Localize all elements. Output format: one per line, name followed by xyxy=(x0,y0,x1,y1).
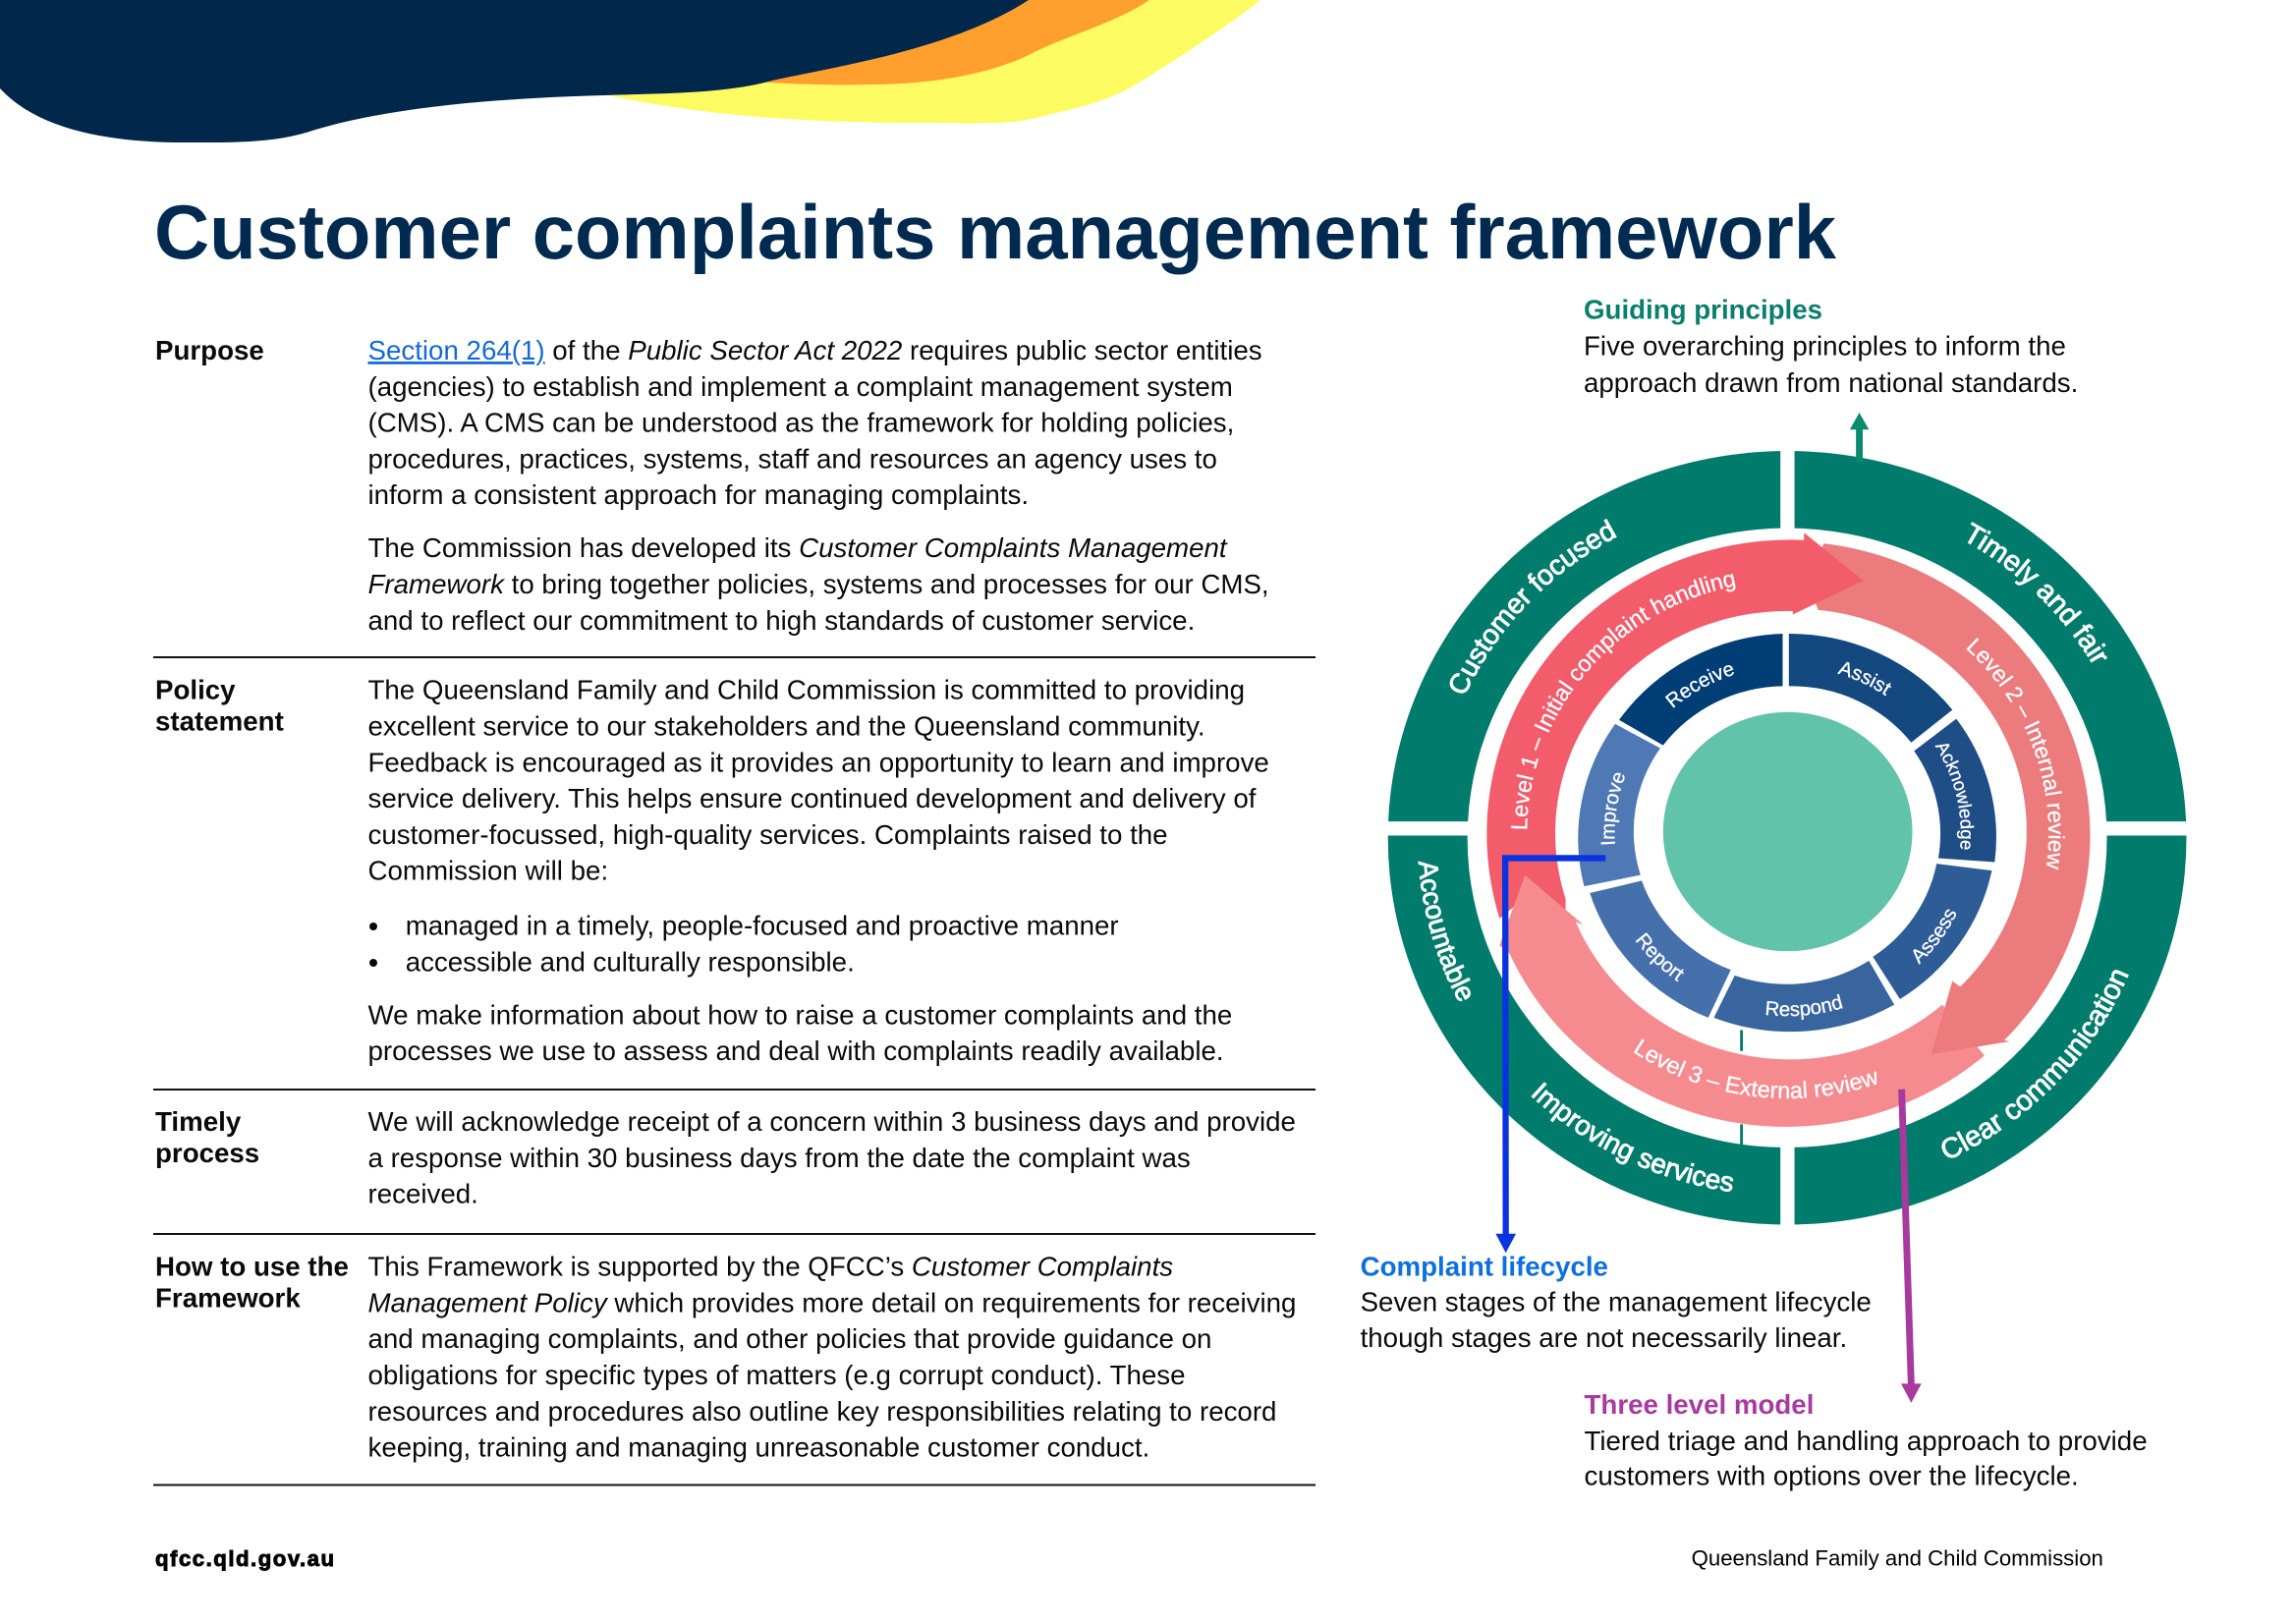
arrow: to complaint lifecycle xyxy=(1495,858,1605,1253)
section: purpose: Section 264(1) of the Public Sector Act 2022 requires public sector entities xyxy=(367,335,1262,365)
section: policy statement: statement xyxy=(155,705,284,737)
section: policy statement: customer-focussed, high-quality services. Complaints raised to the xyxy=(367,819,1168,850)
ring: guiding principles: Timely and fair xyxy=(1967,522,2107,662)
callout: guiding principles: Five overarching principles to inform the xyxy=(1584,331,2066,362)
section: policy statement: We make information about how to raise a customer complaints and the xyxy=(367,999,1232,1030)
callout: complaint lifecycle: though stages are not necessarily linear. xyxy=(1361,1322,1847,1353)
section: timely process: Timely xyxy=(155,1106,242,1137)
section: purpose: (agencies) to establish and implement a complaint management system xyxy=(367,371,1233,402)
footer: organisation: Queensland Family and Child Commission xyxy=(1692,1545,2103,1570)
ring: complaint lifecycle stages: Assess xyxy=(1913,910,1956,965)
section: policy statement: managed in a timely, people-focused and proactive manner xyxy=(406,911,1119,941)
callout: complaint lifecycle xyxy=(1361,1251,1872,1353)
section: purpose xyxy=(155,335,1269,636)
level 3 arrow head xyxy=(1499,875,1583,953)
ring: complaint lifecycle stages: Report xyxy=(1635,932,1684,982)
callout: three level model: Three level model xyxy=(1584,1389,1814,1420)
section: how to use the framework: Framework xyxy=(155,1283,301,1314)
ring: complaint lifecycle stages: Assist xyxy=(1837,662,1892,696)
section: timely process: We will acknowledge receipt of a concern within 3 business days and provide xyxy=(367,1106,1296,1137)
section: policy statement: Feedback is encouraged as it provides an opportunity to learn and improve xyxy=(367,747,1269,777)
section: policy statement: processes we use to assess and deal with complaints readily available. xyxy=(367,1036,1224,1066)
section: timely process: process xyxy=(155,1138,259,1168)
level 1 arrow xyxy=(1486,532,1863,919)
section: purpose: inform a consistent approach for managing complaints. xyxy=(367,479,1029,510)
section: purpose: Purpose xyxy=(155,335,264,365)
level 2 arrow xyxy=(1816,543,2091,1054)
section: purpose: procedures, practices, systems, staff and resources an agency uses to xyxy=(367,443,1217,474)
callout: guiding principles xyxy=(1584,294,2078,398)
section: policy statement: The Queensland Family and Child Commission is committed to providing xyxy=(367,675,1245,705)
ring: complaint lifecycle stages: Receive xyxy=(1664,665,1734,707)
section: timely process xyxy=(155,1106,1296,1209)
section: policy statement: accessible and culturally responsible. xyxy=(406,947,855,977)
section: policy statement: excellent service to our stakeholders and the Queensland community. xyxy=(367,711,1205,741)
section: policy statement: Policy xyxy=(155,675,236,705)
section: how to use the framework: resources and procedures also outline key responsibilities relating to record xyxy=(367,1396,1276,1427)
callout: complaint lifecycle: Complaint lifecycle xyxy=(1361,1251,1608,1281)
footer: website: qfcc.qld.gov.au xyxy=(155,1546,336,1571)
section: purpose: (CMS). A CMS can be understood as the framework for holding policies, xyxy=(367,408,1234,438)
header wave banner xyxy=(0,0,1260,142)
level 3 arrow: Level 3 – External review xyxy=(1633,1038,1876,1098)
ring: guiding principles: Accountable xyxy=(1418,861,1471,1002)
callout: three level model: customers with options over the lifecycle. xyxy=(1584,1461,2079,1491)
ring: guiding principles: Customer focused xyxy=(1450,519,1617,694)
section: policy statement: service delivery. This helps ensure continued development and delivery of xyxy=(367,783,1257,813)
callout: guiding principles: Guiding principles xyxy=(1584,294,1822,324)
section: how to use the framework: obligations for specific types of matters (e.g corrupt conduct). These xyxy=(367,1360,1186,1390)
title: Customer complaints management framework xyxy=(154,191,1837,275)
callout: three level model xyxy=(1584,1389,2148,1491)
centre circle xyxy=(1663,712,1913,951)
section: policy statement: Commission will be: xyxy=(367,856,608,886)
ring: complaint lifecycle stages: Respond xyxy=(1766,994,1843,1020)
section: how to use the framework: keeping, training and managing unreasonable customer conduct. xyxy=(367,1432,1149,1463)
section: timely process: received. xyxy=(367,1179,478,1209)
callout: complaint lifecycle: Seven stages of the management lifecycle xyxy=(1361,1286,1872,1316)
arrow: to guiding principles xyxy=(1850,413,1869,463)
section: how to use the framework xyxy=(155,1252,1296,1463)
ring: complaint lifecycle stages: Acknowledge xyxy=(1934,744,1975,850)
section: purpose: Framework to bring together policies, systems and processes for our CMS, xyxy=(367,569,1269,599)
level 3 arrow xyxy=(1499,908,1985,1127)
ring: guiding principles: Improving services xyxy=(1531,1082,1733,1192)
callout: three level model: Tiered triage and handling approach to provide xyxy=(1584,1426,2148,1456)
section: purpose: The Commission has developed its Customer Complaints Management xyxy=(367,532,1228,563)
section: how to use the framework: This Framework is supported by the QFCC’s Customer Complaints xyxy=(367,1252,1173,1282)
section: how to use the framework: Management Policy which provides more detail on requirements for receiving xyxy=(367,1287,1296,1317)
section: how to use the framework: and managing complaints, and other policies that provide guidance on xyxy=(367,1323,1211,1354)
section: purpose: and to reflect our commitment to high standards of customer service. xyxy=(367,605,1195,636)
arrow: to three level model xyxy=(1901,1090,1922,1403)
section: policy statement xyxy=(155,675,1269,1066)
level 1 arrow: Level 1 – Initial complaint handling xyxy=(1511,574,1735,829)
callout: guiding principles: approach drawn from national standards. xyxy=(1584,367,2078,398)
ring: complaint lifecycle stages xyxy=(1578,634,1996,1032)
section: timely process: a response within 30 business days from the date the complaint was xyxy=(367,1143,1191,1173)
level 2 arrow: Level 2 – Internal review xyxy=(1967,638,2065,870)
framework wheel diagram xyxy=(1387,413,2187,1403)
section: how to use the framework: How to use the xyxy=(155,1252,349,1282)
ring: guiding principles: Clear communication xyxy=(1941,970,2129,1158)
ring: complaint lifecycle stages: Improve xyxy=(1601,772,1625,845)
ring: guiding principles xyxy=(1387,451,2187,1224)
